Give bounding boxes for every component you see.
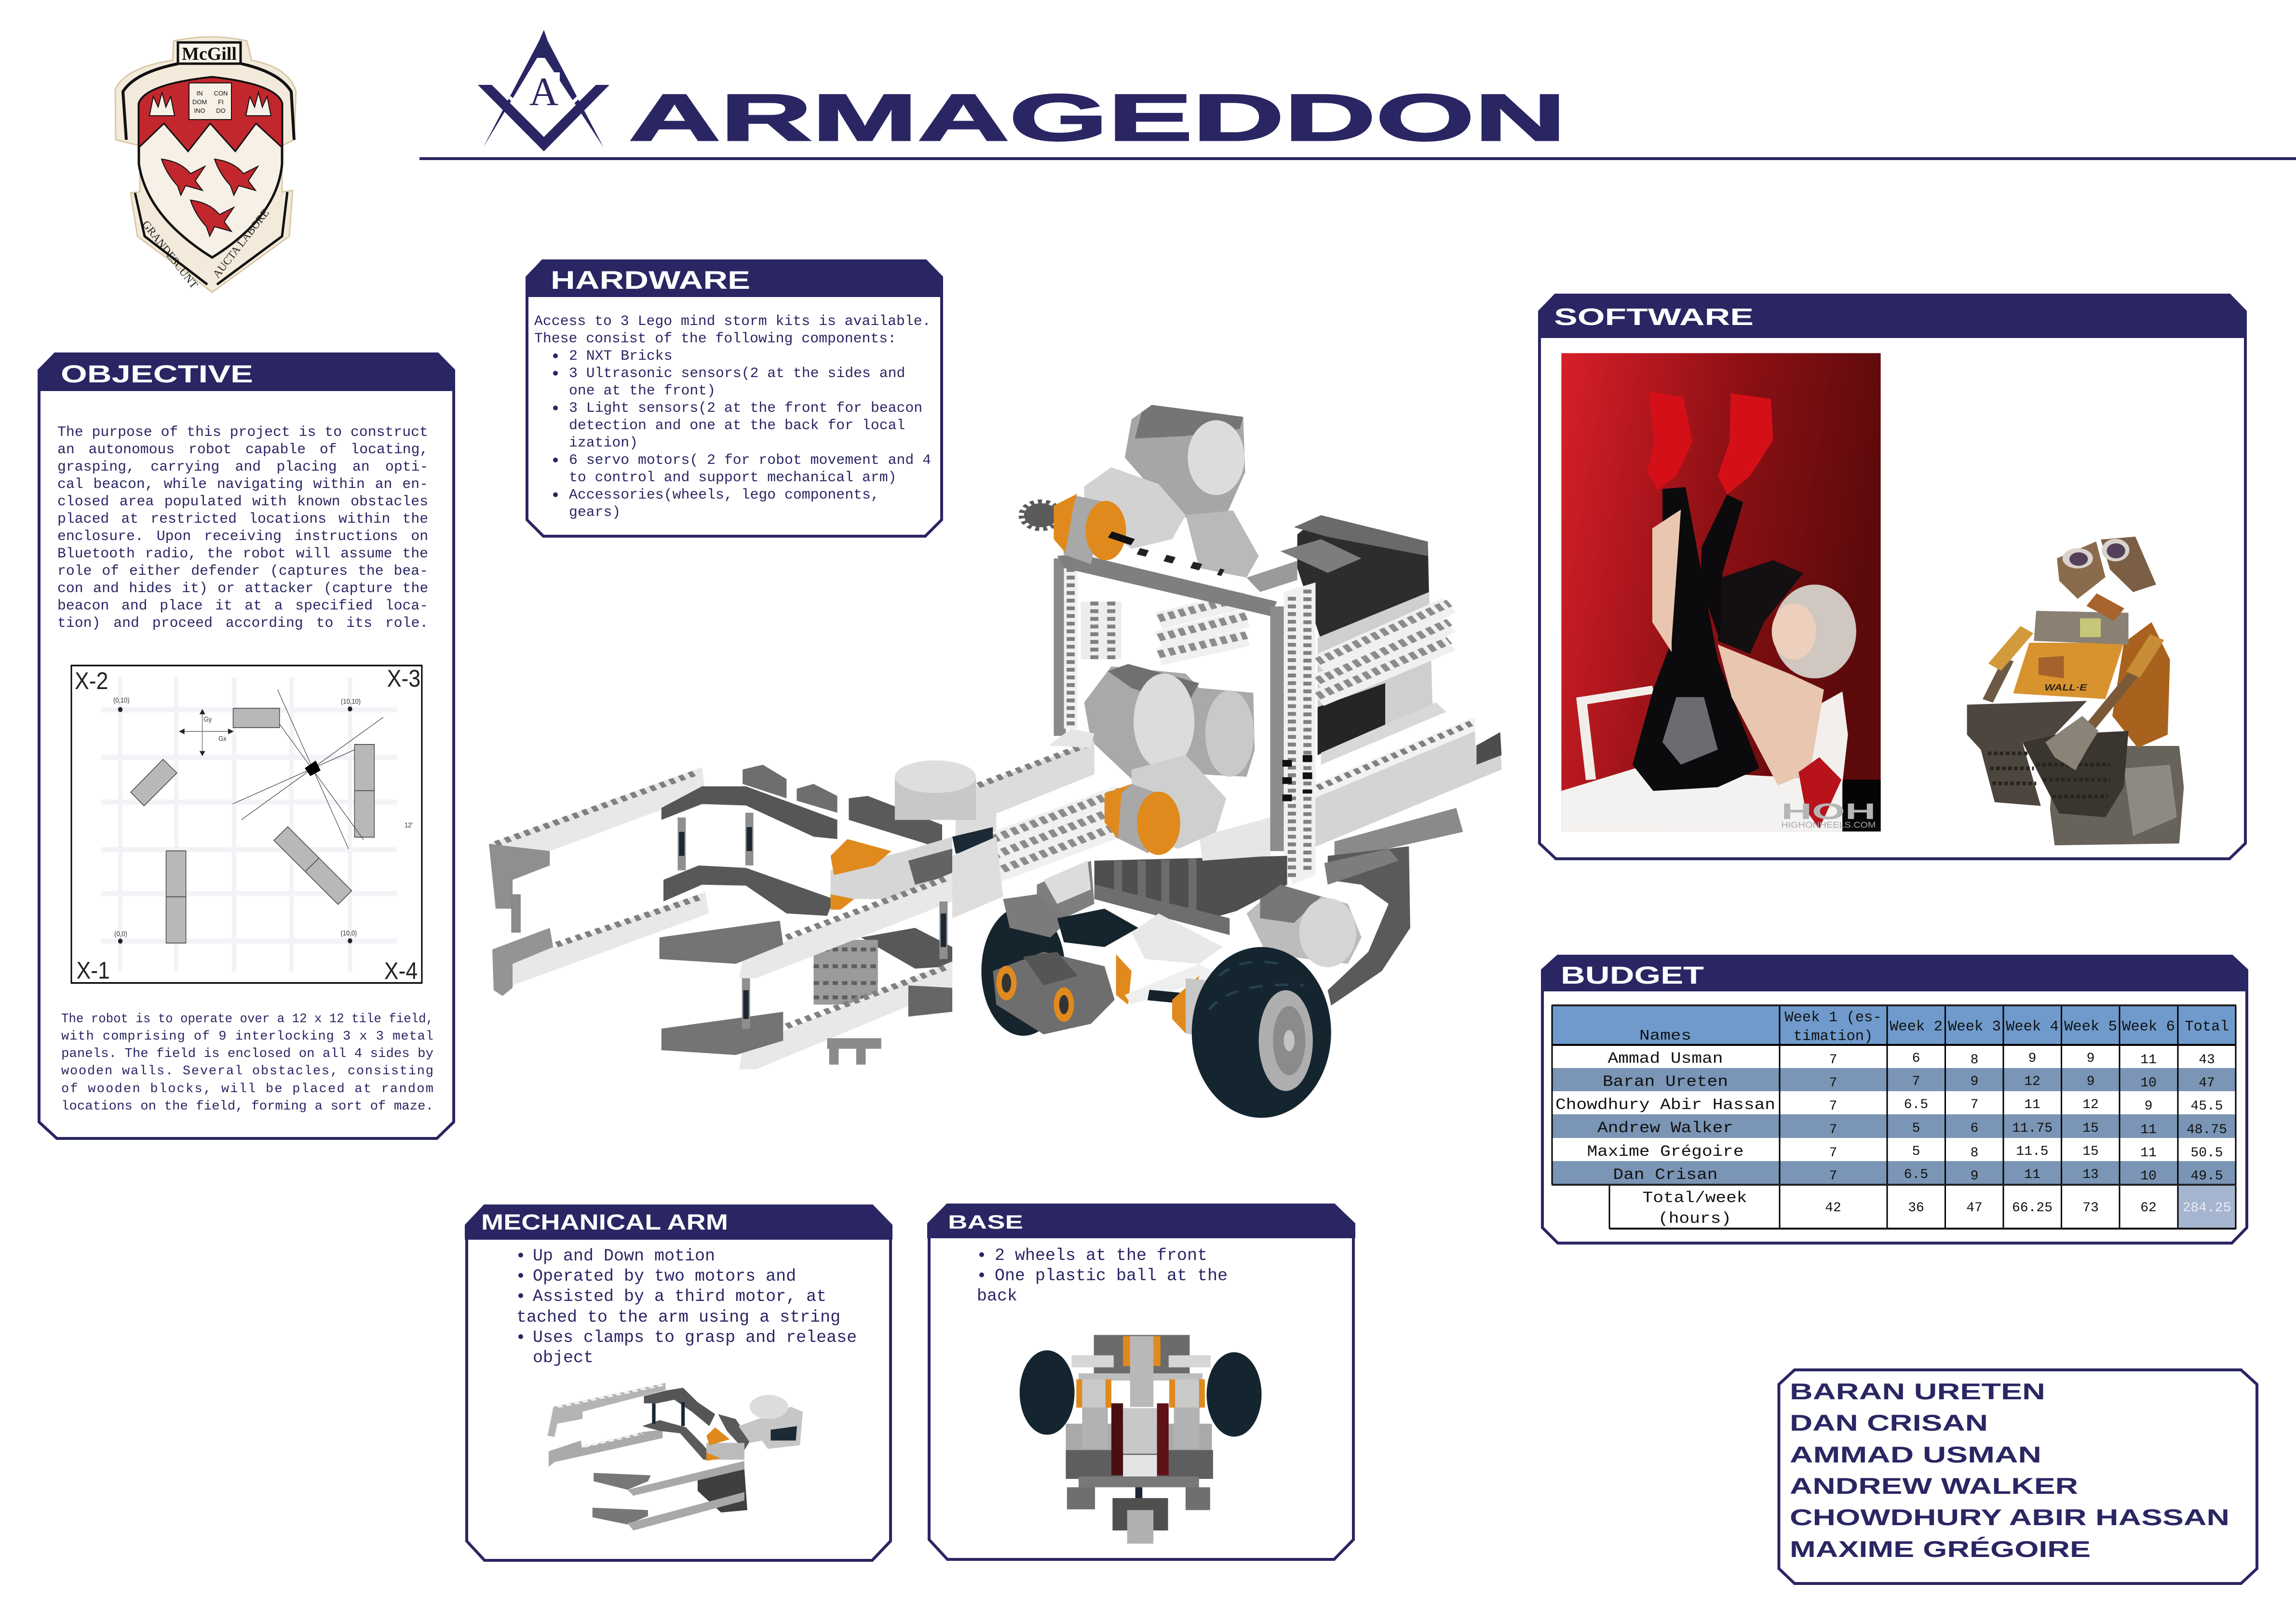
budget table: 284.25 (2183, 1201, 2231, 1216)
budget table: Andrew Walker (1597, 1119, 1733, 1137)
objective header bar (38, 352, 455, 391)
crest: McGill coat of arms: AUCTA LABORE (210, 207, 271, 280)
photo watermark (1781, 799, 1876, 830)
robot: rear brick and body (1281, 515, 1446, 765)
hardware text: gears) (569, 504, 621, 520)
budget table: Week 6 (2122, 1019, 2175, 1035)
logo: compass and square emblem (478, 30, 609, 151)
hardware text: Accessories(wheels, lego components, (569, 487, 879, 503)
budget table: 66.25 (2012, 1201, 2053, 1216)
robot: sensor and rear wheel (981, 894, 1138, 1036)
team member list: MAXIME GRÉGOIRE (1790, 1536, 2091, 1562)
base text: back (977, 1286, 1017, 1306)
robot: right motor and axle (1125, 846, 1410, 1036)
team member list (1790, 1379, 2229, 1562)
budget table: 11 (2140, 1053, 2157, 1068)
budget table: Baran Ureten (1603, 1073, 1728, 1091)
software header bar (1538, 294, 2247, 338)
budget table: 7 (1912, 1074, 1920, 1089)
objective text: an autonomous robot capable of locating, (57, 441, 428, 458)
budget table: 50.5 (2190, 1146, 2223, 1161)
panel: team names (1779, 1370, 2257, 1583)
team member list: BARAN URETEN (1790, 1379, 2045, 1404)
crest: McGill coat of arms (115, 37, 296, 292)
robot: right beams (1159, 597, 1501, 861)
budget table: 7 (1971, 1097, 1978, 1112)
budget table: Names (1639, 1028, 1691, 1044)
budget table: 8 (1971, 1146, 1978, 1161)
budget table (1552, 1004, 2236, 1230)
hardware text: 2 NXT Bricks (569, 348, 673, 364)
hardware text: 3 Light sensors(2 at the front for beacon (569, 400, 922, 416)
field diagram (71, 665, 422, 985)
objective text: The purpose of this project is to construct (57, 424, 428, 440)
budget table: 11 (2024, 1097, 2040, 1112)
field description text: with comprising of 9 interlocking 3 x 3 metal (61, 1029, 433, 1044)
objective text: grasping, carrying and placing an opti- (57, 459, 428, 475)
mechanical arm header bar (465, 1204, 892, 1240)
budget table: Week 1 (es- (1784, 1010, 1882, 1026)
budget table: 11.75 (2012, 1121, 2053, 1136)
field diagram: 12' (405, 821, 413, 829)
budget table: 6.5 (1904, 1167, 1928, 1182)
field diagram: X-4 (384, 958, 418, 985)
robot: upper motor (1021, 405, 1297, 592)
objective text: cal beacon, while navigating within an en- (57, 476, 428, 492)
objective frame (39, 354, 454, 1138)
mechanical arm text: tached to the arm using a string (516, 1308, 840, 1327)
budget table: 13 (2082, 1167, 2099, 1182)
base text: One plastic ball at the (995, 1266, 1228, 1286)
budget table: 8 (1971, 1053, 1978, 1068)
mechanical arm frame (467, 1206, 891, 1560)
budget table: 9 (2028, 1051, 2036, 1066)
budget table: 7 (1829, 1099, 1837, 1114)
budget table: Maxime Grégoire (1587, 1143, 1743, 1161)
hardware text: to control and support mechanical arm) (569, 469, 896, 486)
logo: compass and square emblem: A (529, 69, 559, 114)
budget table: 11 (2024, 1167, 2040, 1182)
budget table: 11.5 (2016, 1144, 2049, 1159)
objective text: enclosure. Upon receiving instructions on (57, 528, 428, 544)
budget table: 11 (2140, 1123, 2157, 1137)
mechanical arm text: object (533, 1348, 594, 1367)
team member list: DAN CRISAN (1790, 1410, 1988, 1435)
objective text: tion) and proceed according to its role. (57, 615, 428, 631)
software frame (1540, 295, 2245, 859)
objective text: placed at restricted locations within the (57, 511, 428, 527)
hardware text: 3 Ultrasonic sensors(2 at the sides and (569, 365, 905, 381)
hardware header bar (526, 259, 943, 297)
budget table: Chowdhury Abir Hassan (1555, 1096, 1775, 1114)
budget table: 7 (1829, 1076, 1837, 1091)
mechanical arm text: Assisted by a third motor, at (533, 1287, 826, 1306)
panel: mechanical arm (465, 1204, 892, 1560)
budget table: 47 (1966, 1201, 1983, 1216)
budget header bar (1541, 955, 2248, 991)
hardware text: These consist of the following components: (534, 330, 896, 347)
objective text (57, 424, 428, 631)
budget table: Total (2185, 1019, 2229, 1035)
crest: McGill coat of arms: CON (214, 90, 228, 97)
title underline (419, 157, 2296, 160)
budget table: 10 (2140, 1169, 2157, 1184)
panel: objective (38, 352, 455, 1138)
field description text: The robot is to operate over a 12 x 12 tile field, (61, 1012, 433, 1027)
budget table: 36 (1908, 1201, 1924, 1216)
software heading: SOFTWARE (1554, 304, 1754, 330)
hardware frame (527, 261, 942, 536)
hardware text: Access to 3 Lego mind storm kits is available. (534, 313, 931, 329)
objective text: con and hides it) or attacker (capture the (57, 580, 428, 596)
field diagram: (0,10) (113, 696, 130, 704)
budget table: 42 (1825, 1201, 1841, 1216)
robot: front beams and motor hub (956, 729, 1226, 923)
budget table: Ammad Usman (1607, 1050, 1723, 1068)
field diagram: (0,0) (114, 930, 127, 937)
budget table: 6 (1971, 1121, 1978, 1136)
mechanical arm text: Up and Down motion (533, 1246, 715, 1266)
base text (977, 1246, 1228, 1306)
panel: hardware (526, 259, 943, 536)
base heading: BASE (948, 1212, 1023, 1233)
budget frame (1542, 956, 2247, 1243)
team member list: AMMAD USMAN (1790, 1442, 2041, 1467)
crest: McGill coat of arms: IN (197, 90, 203, 97)
field diagram: X-3 (387, 665, 420, 692)
field description text (61, 1012, 433, 1114)
budget table: 9 (2087, 1074, 2094, 1089)
budget table: timation) (1794, 1029, 1873, 1045)
budget table: 12 (2024, 1074, 2040, 1089)
hardware text: detection and one at the back for local (569, 417, 905, 433)
budget table: 15 (2082, 1144, 2099, 1159)
title: ARMAGEDDON: ARMAGEDDON (629, 81, 1566, 155)
budget table: Week 4 (2006, 1019, 2059, 1035)
objective text: Bluetooth radio, the robot will assume the (57, 545, 428, 562)
budget table: 62 (2140, 1201, 2157, 1216)
budget table: 6 (1912, 1051, 1920, 1066)
budget table: 45.5 (2190, 1099, 2223, 1114)
budget table: Week 5 (2064, 1019, 2117, 1035)
photo watermark: HOH (1781, 799, 1876, 824)
budget table: 5 (1912, 1144, 1920, 1159)
objective text: closed area populated with known obstacles (57, 493, 428, 510)
robot: rear frame (1054, 554, 1315, 885)
budget table: 73 (2082, 1201, 2099, 1216)
field description text: panels. The field is enclosed on all 4 sides by (61, 1047, 433, 1061)
photo watermark: HIGHONHEELS.COM (1781, 821, 1876, 830)
hardware text (534, 313, 931, 520)
budget table: 43 (2199, 1053, 2215, 1068)
field diagram: (10,10) (341, 698, 361, 705)
budget table: (hours) (1658, 1210, 1731, 1228)
field description text: locations on the field, forming a sort of maze. (61, 1099, 433, 1114)
budget table: 7 (1829, 1146, 1837, 1161)
base text: 2 wheels at the front (995, 1246, 1207, 1265)
objective text: beacon and place it at a specified loca- (57, 597, 428, 614)
budget table: 9 (2145, 1099, 2152, 1114)
budget table: 48.75 (2187, 1123, 2227, 1137)
budget table: 9 (1971, 1169, 1978, 1184)
team member list: ANDREW WALKER (1790, 1473, 2078, 1499)
budget table: Total/week (1642, 1189, 1747, 1207)
crest: McGill coat of arms: FI (218, 98, 224, 106)
panel: software (1538, 294, 2247, 859)
budget table: Week 2 (1890, 1019, 1943, 1035)
robot: clamp upper arm (489, 765, 837, 996)
photo: red studio background, simplified colour blocks (1561, 353, 1881, 831)
field diagram: X-1 (77, 957, 110, 984)
mechanical arm render (547, 1383, 803, 1530)
crest: McGill coat of arms: INO (194, 107, 205, 114)
budget table: 47 (2199, 1076, 2215, 1091)
field diagram: Gy (204, 716, 212, 723)
team member list: CHOWDHURY ABIR HASSAN (1790, 1504, 2229, 1530)
objective heading: OBJECTIVE (61, 360, 253, 388)
robot: front wheel (1192, 947, 1331, 1118)
hardware text: one at the front) (569, 382, 716, 399)
budget table: 6.5 (1904, 1097, 1928, 1112)
mechanical arm text: Uses clamps to grasp and release (533, 1328, 857, 1347)
budget table: 15 (2082, 1121, 2099, 1136)
crest: McGill coat of arms: GRANDESCUNT (140, 218, 200, 291)
field diagram: X-2 (75, 668, 108, 694)
budget table: Dan Crisan (1613, 1166, 1717, 1184)
hardware text: 6 servo motors( 2 for robot movement and 4 (569, 452, 931, 468)
base render (1020, 1335, 1261, 1543)
objective text: role of either defender (captures the bea- (57, 563, 428, 579)
field description text: of wooden blocks, will be placed at random (61, 1082, 433, 1096)
field description text: wooden walls. Several obstacles, consisting (61, 1064, 433, 1079)
field diagram: Gx (218, 735, 227, 743)
panel: base (927, 1204, 1355, 1559)
picture: rusty robot on a trash cube (1967, 537, 2184, 845)
budget table: 12 (2082, 1097, 2099, 1112)
mechanical arm text: Operated by two motors and (533, 1267, 796, 1286)
budget table: 5 (1912, 1121, 1920, 1136)
budget table: 7 (1829, 1169, 1837, 1184)
base header bar (927, 1204, 1355, 1238)
budget table: Week 3 (1948, 1019, 2001, 1035)
hardware heading: HARDWARE (551, 266, 750, 295)
team frame (1779, 1370, 2257, 1583)
field diagram: (10,0) (341, 929, 357, 937)
main robot render (489, 405, 1501, 1118)
budget table: 9 (1971, 1074, 1978, 1089)
budget table: 7 (1829, 1053, 1837, 1068)
hardware text: ization) (569, 434, 638, 451)
crest: McGill coat of arms: McGill (182, 44, 237, 64)
budget table: 11 (2140, 1146, 2157, 1161)
crest: McGill coat of arms: DOM (192, 98, 207, 106)
robot: middle motors (1084, 664, 1287, 964)
crest: McGill coat of arms: DO (216, 107, 226, 114)
panel: budget (1541, 955, 2248, 1243)
budget table: 10 (2140, 1076, 2157, 1091)
mechanical arm text (516, 1246, 857, 1367)
budget table: 49.5 (2190, 1169, 2223, 1184)
picture: rusty robot on a trash cube: WALL·E (2044, 683, 2087, 692)
base frame (929, 1205, 1353, 1559)
robot: beacon and hinge (831, 760, 1003, 918)
budget table: 9 (2087, 1051, 2094, 1066)
robot: clamp lower arm (660, 873, 952, 1069)
mechanical arm heading: MECHANICAL ARM (481, 1210, 728, 1234)
budget table: 7 (1829, 1123, 1837, 1137)
budget heading: BUDGET (1561, 961, 1704, 989)
